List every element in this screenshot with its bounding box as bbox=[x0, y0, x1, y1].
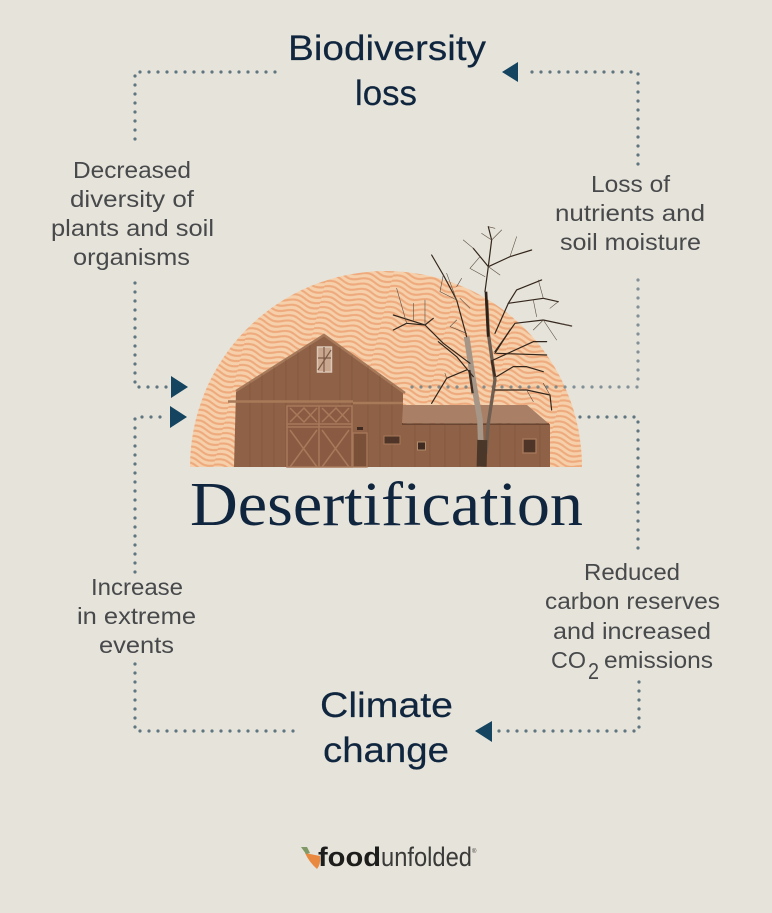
bare tree bbox=[393, 227, 572, 467]
tree trunk bbox=[467, 337, 482, 467]
barn main body bbox=[234, 336, 403, 467]
heading: biodiversity loss: Biodiversity bbox=[288, 29, 487, 68]
text: increase in extreme events: events bbox=[99, 632, 174, 658]
logo: foodunfolded bbox=[301, 842, 477, 872]
barn plank shading bbox=[250, 345, 392, 467]
barn double door bbox=[287, 406, 352, 467]
text: reduced carbon reserves: carbon reserves bbox=[545, 588, 720, 614]
heading: biodiversity loss: loss bbox=[355, 74, 417, 113]
barn small door bbox=[353, 427, 367, 467]
barn beam bbox=[228, 402, 403, 403]
text: increase in extreme events: in extreme bbox=[77, 603, 196, 629]
text: decreased diversity bbox=[51, 157, 214, 270]
heading: climate change bbox=[320, 686, 453, 770]
logo: foodunfolded: unfolded bbox=[381, 842, 472, 872]
dotted connector: top left to biodiversity loss bbox=[135, 72, 280, 139]
text: loss of nutrients: Loss of bbox=[591, 171, 671, 197]
text: loss of nutrients bbox=[555, 171, 705, 255]
text: increase in extreme events: Increase bbox=[91, 574, 183, 600]
text: reduced carbon reserves: CO bbox=[551, 647, 586, 673]
tree main branches bbox=[393, 227, 572, 410]
tree fine twigs bbox=[397, 227, 572, 402]
text: reduced carbon reserves: 2 bbox=[588, 658, 599, 684]
dotted connector: extreme events to desertification bbox=[135, 417, 162, 572]
lean-to small window bbox=[418, 442, 426, 450]
lean-to eave bbox=[402, 423, 549, 425]
icon: carrot bbox=[301, 847, 320, 869]
text: decreased diversity: Decreased bbox=[73, 157, 191, 183]
text: decreased diversity: plants and soil bbox=[51, 215, 214, 241]
wavy semicircle sun bbox=[190, 271, 582, 467]
title: desertification: Desertification bbox=[190, 471, 583, 539]
text: loss of nutrients: soil moisture bbox=[560, 229, 701, 255]
lean-to right window bbox=[523, 439, 536, 453]
dotted connector: biodiversity to desertification bbox=[135, 283, 168, 387]
arrow: climate to desertification bbox=[170, 406, 187, 428]
arrow: into biodiversity loss bbox=[502, 62, 518, 82]
barn illustration bbox=[228, 335, 550, 467]
text: reduced carbon reserves: and increased bbox=[553, 618, 711, 644]
dotted connector: bottom left from climate change bbox=[135, 664, 302, 731]
text: reduced carbon reserves: emissions bbox=[604, 647, 713, 673]
logo: foodunfolded: food bbox=[318, 842, 381, 872]
heading: climate change: change bbox=[323, 731, 449, 770]
barn attic window bbox=[318, 347, 332, 372]
lean-to roof bbox=[402, 405, 548, 423]
logo: foodunfolded: ® bbox=[472, 848, 477, 855]
arrow: biodiversity to desertification bbox=[171, 376, 188, 398]
text: decreased diversity: organisms bbox=[73, 244, 190, 270]
heading: climate change: Climate bbox=[320, 686, 453, 725]
barn window bbox=[384, 436, 400, 444]
dotted connector: desertification to reduced carbon bbox=[580, 417, 638, 556]
dotted connector: top right into biodiversity loss bbox=[527, 72, 638, 164]
dotted connector: bottom right into climate change bbox=[497, 682, 639, 731]
arrow: into climate change bbox=[475, 721, 492, 742]
barn roof edge bbox=[236, 335, 405, 393]
heading: biodiversity loss bbox=[288, 29, 487, 113]
text: decreased diversity: diversity of bbox=[70, 186, 195, 212]
text: reduced carbon reserves: Reduced bbox=[584, 559, 680, 585]
dotted connector: loss of nutrients to desertification bbox=[406, 280, 638, 387]
lean-to wall bbox=[403, 424, 550, 467]
text: loss of nutrients: nutrients and bbox=[555, 200, 705, 226]
text: increase in extreme events bbox=[77, 574, 196, 658]
lean-to plank shading bbox=[415, 425, 540, 467]
text: reduced carbon reserves bbox=[545, 559, 720, 684]
